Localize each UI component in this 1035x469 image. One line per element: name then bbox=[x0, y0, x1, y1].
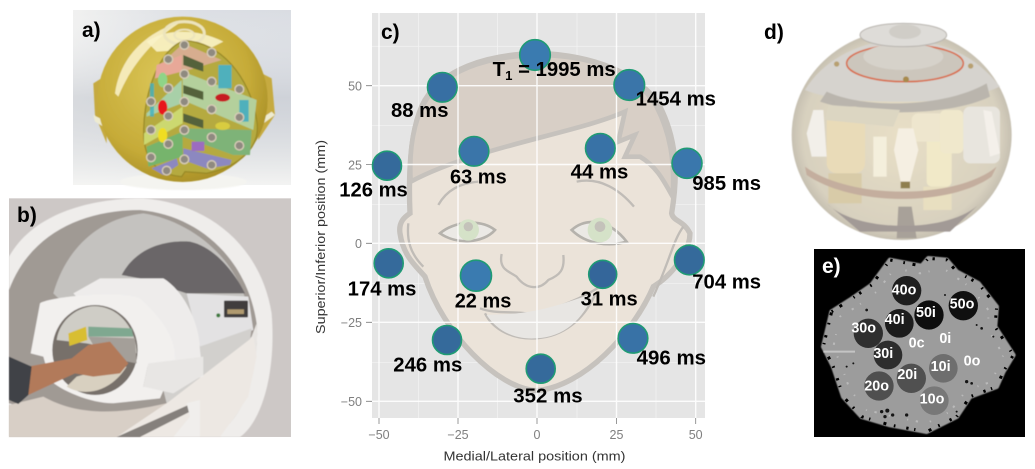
label b: b) bbox=[17, 204, 37, 227]
T1 value labels: 44 ms bbox=[571, 162, 628, 184]
T1 value labels: 31 ms bbox=[581, 288, 638, 310]
x tick labels: −25 bbox=[447, 428, 469, 442]
label c: c) bbox=[381, 21, 400, 44]
T1 value labels: 174 ms bbox=[348, 279, 416, 301]
T1 value labels: 126 ms bbox=[339, 180, 408, 202]
panel a: cutaway gold sphere phantom bbox=[73, 10, 291, 190]
panel c: T1 map chart bbox=[313, 13, 761, 464]
data points bbox=[372, 40, 704, 383]
vial labels: 0o bbox=[964, 353, 981, 369]
x tick labels: 0 bbox=[534, 428, 541, 442]
head coil bbox=[73, 278, 203, 383]
T1 value labels: 352 ms bbox=[513, 386, 583, 408]
label e: e) bbox=[822, 255, 841, 278]
vial labels: 50i bbox=[916, 305, 936, 321]
vial labels: 10o bbox=[920, 391, 945, 407]
illustration: cartoon face bbox=[400, 53, 690, 391]
label a: a) bbox=[82, 19, 101, 42]
T1 value labels bbox=[339, 59, 761, 408]
arm and hand bbox=[28, 342, 128, 395]
vial labels bbox=[851, 282, 981, 407]
T1 value labels: 88 ms bbox=[391, 100, 448, 122]
y tick labels: 0 bbox=[355, 237, 362, 251]
T1 value labels: T bbox=[493, 59, 505, 81]
y tick labels: 50 bbox=[348, 80, 362, 94]
vial labels: 0i bbox=[939, 331, 951, 347]
plot background bbox=[372, 13, 705, 418]
T1 value labels: 1454 ms bbox=[636, 89, 716, 111]
x tick labels: −50 bbox=[368, 428, 390, 442]
T1 value labels: 496 ms bbox=[637, 347, 706, 369]
panel d: clear diffusion phantom bbox=[792, 23, 1012, 240]
panel b: phantom in MRI head coil bbox=[9, 198, 291, 437]
panel e: phantom T1 slice image bbox=[814, 249, 1025, 437]
T1 value labels: 704 ms bbox=[692, 272, 761, 294]
vial labels: 10i bbox=[931, 359, 951, 375]
T1 value labels: 22 ms bbox=[455, 290, 511, 312]
y tick labels bbox=[341, 80, 362, 409]
vial labels: 30i bbox=[873, 346, 893, 362]
vial labels: 0c bbox=[909, 336, 925, 352]
T1 value labels: 246 ms bbox=[393, 355, 462, 377]
x tick labels: 25 bbox=[610, 428, 623, 442]
x tick labels bbox=[368, 428, 703, 442]
x axis title: Medial/Lateral position (mm) bbox=[444, 448, 626, 464]
vial labels: 20i bbox=[897, 367, 917, 383]
vial labels: 50o bbox=[950, 296, 975, 312]
y tick labels: −50 bbox=[341, 395, 362, 409]
vial labels: 30o bbox=[851, 320, 876, 336]
T1 value labels: 63 ms bbox=[450, 166, 507, 188]
axis ticks bbox=[366, 86, 696, 424]
T1 value labels: 985 ms bbox=[692, 173, 761, 195]
vial labels: 40o bbox=[892, 282, 917, 298]
T1 value labels: = 1995 ms bbox=[512, 59, 616, 81]
y tick labels: 25 bbox=[348, 158, 362, 172]
label d: d) bbox=[764, 21, 784, 44]
vial labels: 40i bbox=[885, 312, 905, 328]
T1 value labels: 1 bbox=[505, 68, 512, 83]
y tick labels: −25 bbox=[341, 316, 362, 330]
vial labels: 20o bbox=[864, 378, 889, 394]
x tick labels: 50 bbox=[689, 428, 703, 442]
cutaway interior bbox=[144, 41, 257, 177]
y axis title: Superior/Inferior position (mm) bbox=[313, 140, 328, 334]
